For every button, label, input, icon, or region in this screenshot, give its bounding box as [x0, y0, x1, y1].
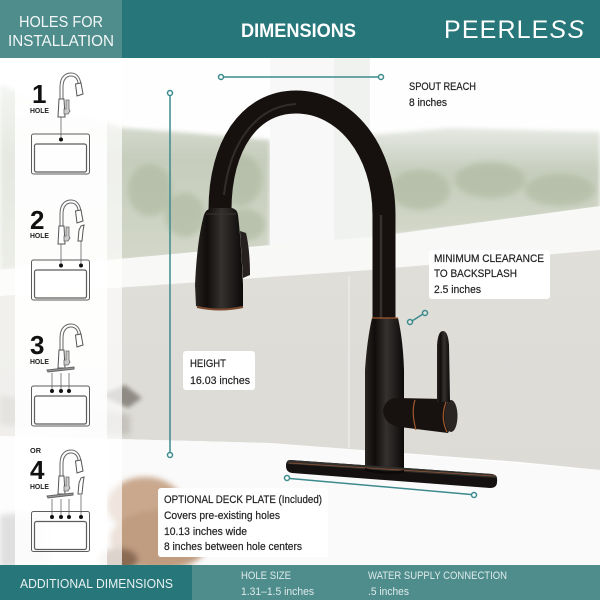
- dimension line: height: [168, 90, 172, 458]
- footer item: hole size: [241, 570, 314, 598]
- label: minimum clearance: 2.5 inches: [434, 284, 481, 296]
- header bar: [0, 0, 600, 58]
- footer item: hole size: 1.31–1.5 inches: [241, 586, 314, 598]
- footer item: water supply connection: [368, 570, 507, 598]
- label: spout reach: [409, 81, 476, 109]
- heading: holes for installation: INSTALLATION: [8, 33, 114, 50]
- option: 2 hole: 2: [30, 205, 44, 235]
- label: minimum clearance: MINIMUM CLEARANCE: [434, 253, 544, 265]
- label: height: [183, 351, 255, 390]
- dimension line: backsplash clearance: [408, 310, 428, 324]
- option: 3 hole: 3: [30, 330, 44, 360]
- footer heading: additional dimensions: ADDITIONAL DIMENSIONS: [20, 576, 173, 591]
- option: 2 hole: HOLE: [30, 231, 49, 240]
- footer bar: [0, 565, 600, 600]
- label: optional deck plate: Covers pre-existing holes: [164, 510, 280, 522]
- panel: holes for installation column: [0, 58, 122, 565]
- footer item: water supply connection: .5 inches: [368, 586, 409, 598]
- gooseneck spout: [220, 102, 384, 322]
- footer item: water supply connection: WATER SUPPLY CONNECTION: [368, 570, 507, 582]
- option: or 4 hole: HOLE: [30, 482, 49, 491]
- option: or 4 hole: 4: [30, 455, 45, 485]
- label: height: 16.03 inches: [190, 375, 250, 387]
- heading: holes for installation: [0, 0, 122, 58]
- option: 3 hole: HOLE: [30, 357, 49, 366]
- option: 1 hole: [30, 73, 90, 174]
- spray head: [195, 208, 243, 309]
- label: optional deck plate: 8 inches between hole centers: [164, 541, 302, 553]
- option: 1 hole: HOLE: [30, 106, 49, 115]
- body: [365, 318, 404, 472]
- option: 2 hole: [30, 200, 90, 300]
- option: or 4 hole: [30, 446, 90, 552]
- heading: holes for installation: HOLES FOR: [19, 14, 103, 31]
- deck plate: [286, 460, 497, 488]
- label: height: HEIGHT: [190, 358, 226, 370]
- label: minimum clearance: TO BACKSPLASH: [434, 268, 517, 280]
- label: minimum clearance: [429, 250, 550, 299]
- logo: peerless: PEERLESS: [444, 16, 584, 44]
- faucet product photo: [195, 102, 497, 488]
- option: 1 hole: 1: [32, 79, 46, 109]
- label: optional deck plate: 10.13 inches wide: [164, 526, 247, 538]
- handle: [383, 398, 457, 433]
- label: optional deck plate: [158, 488, 328, 557]
- label: optional deck plate: OPTIONAL DECK PLATE (Included): [164, 494, 322, 506]
- footer item: hole size: HOLE SIZE: [241, 570, 291, 582]
- dimension line: deck plate: [284, 476, 476, 498]
- option: or 4 hole: OR: [30, 446, 42, 455]
- option: 3 hole: [30, 324, 90, 426]
- label: spout reach: SPOUT REACH: [409, 81, 476, 93]
- label: spout reach: 8 inches: [409, 97, 447, 109]
- dimension line: spout reach: [218, 74, 384, 80]
- heading: dimensions: DIMENSIONS: [241, 21, 356, 42]
- lever: [437, 331, 450, 402]
